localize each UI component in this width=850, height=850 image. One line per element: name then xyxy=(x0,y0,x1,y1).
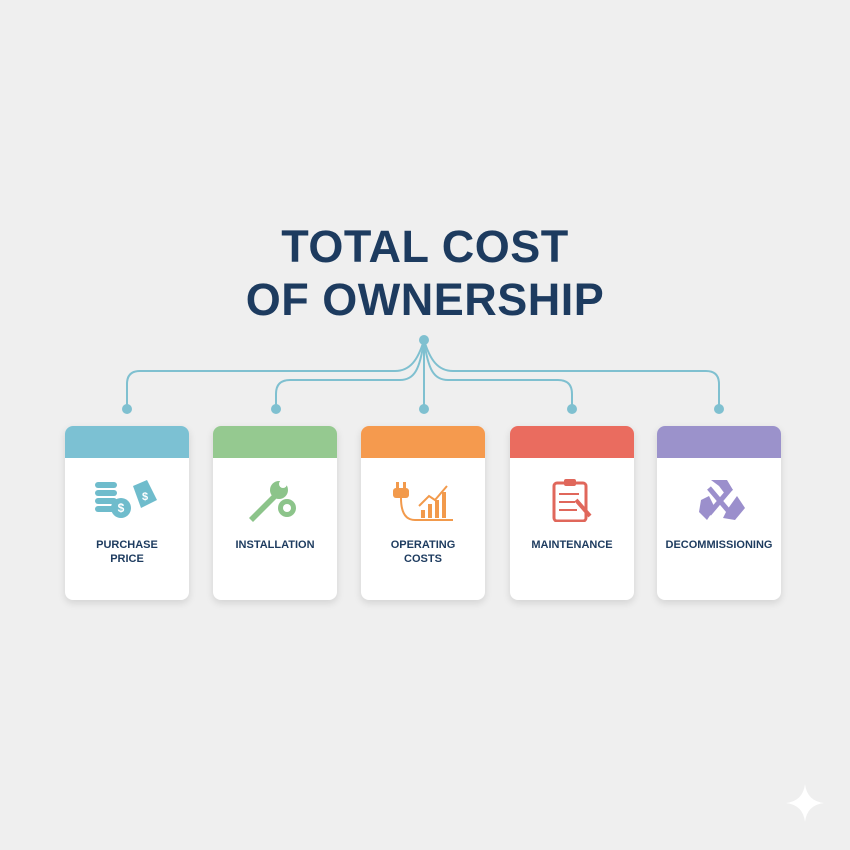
card: maintenance: MAINTENANCE xyxy=(531,539,613,551)
card: operating costs xyxy=(361,426,485,600)
card: decommissioning xyxy=(657,426,781,600)
card: purchase price: PRICE xyxy=(110,553,144,565)
title xyxy=(246,221,604,325)
title: OF OWNERSHIP xyxy=(246,274,604,325)
card: decommissioning: DECOMMISSIONING xyxy=(666,539,772,551)
title: TOTAL COST xyxy=(281,221,569,272)
card: installation: INSTALLATION xyxy=(235,539,315,551)
icon: sparkle xyxy=(788,786,822,820)
card: maintenance xyxy=(510,426,634,600)
card: operating costs: OPERATING xyxy=(391,539,455,551)
icon: coins and tag: $ xyxy=(118,501,125,515)
icon: coins and tag xyxy=(95,480,157,518)
icon: plug and chart xyxy=(393,482,453,521)
card: installation xyxy=(213,426,337,600)
icon: recycle xyxy=(699,480,745,520)
icon: wrench and gear xyxy=(249,481,296,522)
card: purchase price xyxy=(65,426,189,600)
icon: clipboard xyxy=(552,479,592,522)
icon: coins and tag: $ xyxy=(142,491,148,503)
card: purchase price: PURCHASE xyxy=(96,539,158,551)
card: operating costs: COSTS xyxy=(404,553,442,565)
